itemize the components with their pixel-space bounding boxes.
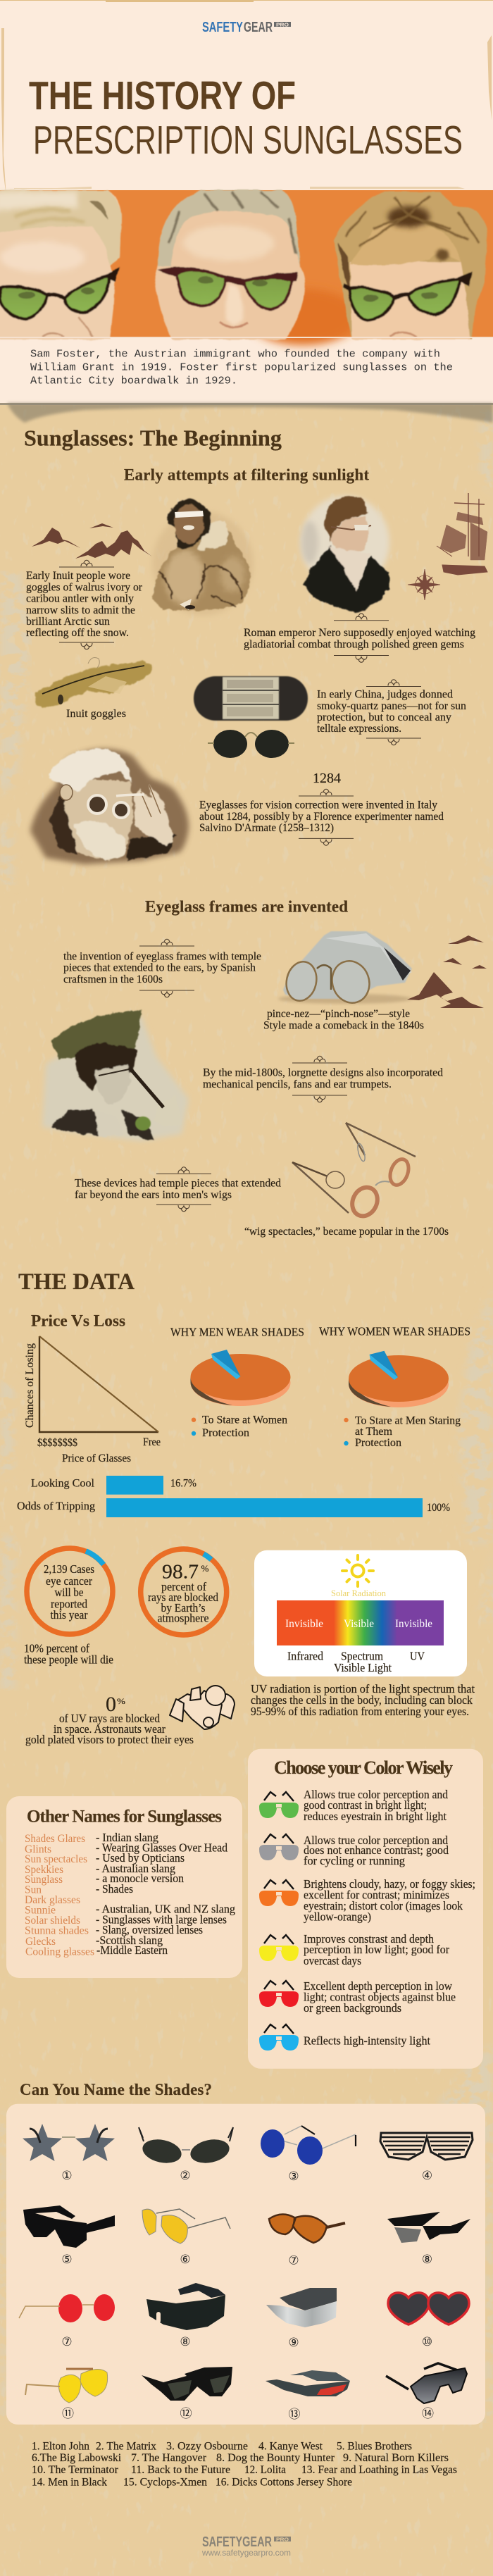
image: Chinese smoky quartz glasses and case (194, 676, 308, 758)
answers list: 3. Ozzy Osbourne (166, 2441, 248, 2453)
panel: quiz sunglasses grid (6, 2104, 485, 2425)
shades 12 black wrap (142, 2367, 232, 2421)
stat circle: rays blocked: percent of (161, 1580, 206, 1593)
color item: orange lens: excellent for contrast; minimizes (304, 1889, 449, 1902)
name notes: - Australian, UK and NZ slang (96, 1903, 235, 1916)
image: Inuit goggles (35, 658, 151, 709)
name notes: - Indian slang (96, 1831, 158, 1844)
names list: Sunglass (25, 1874, 63, 1886)
answers list: 13. Fear and Loathing in Las Vegas (301, 2464, 457, 2476)
text: Inuit goggles history: Early Inuit people wore (26, 570, 130, 582)
text: Inuit goggles history (26, 570, 143, 639)
text: UV radiation: UV radiation is portion of the light spectrum that (251, 1682, 475, 1695)
heading: the data: THE DATA (18, 1269, 135, 1295)
stat: zero percent in space: in space. Astronauts wear (54, 1722, 166, 1736)
heading: sunglasses the beginning: Sunglasses: The Beginning (24, 425, 282, 451)
photo: Inuit person with goggles (152, 499, 254, 616)
name notes: - Wearing Glasses Over Head (96, 1841, 228, 1854)
shades 4: shutter: ④ (422, 2169, 432, 2183)
text: eyeglasses invented: about 1284, possibly by a Florence experimenter named (199, 811, 444, 823)
text: UV radiation (251, 1682, 475, 1718)
text: Nero: gladiatorial combat through polished green gems (244, 639, 464, 651)
shades 5: wayfarer (23, 2205, 115, 2267)
answers list: 2. The Matrix (96, 2441, 156, 2453)
panel: solar radiation: Spectrum (341, 1650, 383, 1663)
shades 12 black wrap: ⑫ (180, 2407, 192, 2421)
pie chart: why women wear shades (319, 1325, 470, 1449)
names list: Cooling glasses (25, 1946, 94, 1958)
text: Inuit goggles history: caribou antler with only (26, 593, 134, 605)
panel: solar radiation: Solar Radiation (331, 1588, 386, 1598)
panel: choose your color wisely (248, 1749, 483, 2069)
icon: astronaut (170, 1686, 235, 1729)
stat circle: rays blocked: 98.7 (162, 1561, 199, 1583)
chart: price vs loss: Chances of Losing (24, 1343, 36, 1428)
bar chart: looking cool vs tripping (17, 1476, 450, 1517)
names list: Sunnie (25, 1905, 56, 1917)
logo: SAFETY (202, 20, 243, 35)
names list: Glints (25, 1843, 51, 1855)
shades 8: sport earbud: ⑧ (422, 2253, 432, 2267)
text: temple pieces: These devices had temple pieces that extended (75, 1178, 281, 1190)
text: lorgnette: mechanical pencils, fans and ear trumpets. (203, 1078, 392, 1090)
color item: yellow lens: perception in low light; good for (304, 1943, 449, 1956)
chart: price vs loss (24, 1312, 161, 1464)
image: wig spectacles (292, 1123, 416, 1220)
shades 5: wayfarer: ⑤ (61, 2253, 73, 2267)
stat: zero percent in space (25, 1693, 194, 1746)
shades 10 heart: ⑩ (422, 2335, 432, 2349)
answers list: 12. Lolita (244, 2464, 286, 2476)
text: 10 percent (24, 1642, 113, 1667)
chart title: Price Vs Loss (31, 1312, 125, 1330)
answers list (32, 2441, 457, 2489)
shades 11 yellow gold (25, 2369, 108, 2421)
footer logo and url: SAFETYGEAR (202, 2534, 272, 2550)
color item: gray lens: does not enhance contrast; good (304, 1843, 449, 1857)
photo: three faces in green sunglasses (0, 190, 493, 345)
stat circle: rays blocked: by Earth’s (161, 1601, 206, 1614)
text: pince-nez (263, 1008, 424, 1031)
text: Nero: Roman emperor Nero supposedly enjoyed watching (244, 627, 475, 639)
title: THE HISTORY OF (29, 73, 296, 118)
panel: solar radiation: Visible Light (334, 1661, 392, 1674)
bar chart: looking cool vs tripping: 100% (427, 1502, 450, 1514)
color item: gray lens: for cycling or running (304, 1854, 405, 1867)
color item: red lens: or green backgrounds (304, 2001, 401, 2015)
shades 14 shield: ⑭ (422, 2407, 434, 2421)
image: pince-nez in silver case (278, 931, 412, 1008)
panel: solar radiation (254, 1550, 467, 1676)
shades 6: yellow aviator (142, 2209, 230, 2267)
answers list: 15. Cyclops-Xmen (123, 2477, 207, 2489)
answers list: 4. Kanye West (258, 2441, 323, 2453)
logo (202, 20, 291, 35)
pie chart: why women wear shades: Protection (355, 1437, 401, 1449)
shades 4: shutter (380, 2133, 473, 2183)
shades 7 red round (19, 2294, 115, 2349)
icon: mountains right (407, 935, 487, 1008)
name notes: - Used by Opticians (96, 1851, 185, 1865)
answers list: 16. Dicks Cottons Jersey Shore (216, 2477, 352, 2489)
text: Inuit goggles history: goggles of walrus ivory or (26, 582, 143, 594)
shades 9 visor: ⑨ (288, 2336, 299, 2350)
text: lorgnette (203, 1067, 443, 1090)
stat circle: eye cancer cases: this year (51, 1608, 88, 1622)
panel: choose your color wisely: Choose your Color Wisely (274, 1757, 453, 1778)
bar chart: looking cool vs tripping: Odds of Tripping (17, 1500, 95, 1512)
stat: zero percent in space: 0 (106, 1693, 116, 1716)
text: lorgnette: By the mid-1800s, lorgnette designs also incorporated (203, 1067, 443, 1079)
photo caption: William Grant in 1919. Foster first popularized sunglasses on the (30, 362, 453, 374)
shades 13 cyclops: ⑬ (289, 2408, 300, 2422)
text: Nero (244, 627, 475, 651)
stat circle: rays blocked: atmosphere (158, 1612, 208, 1625)
text: 10 percent: these people will die (24, 1653, 113, 1667)
pie chart: why women wear shades: WHY WOMEN WEAR SHADES (319, 1325, 470, 1338)
photo: woman with lorgnette (42, 1010, 189, 1141)
logo: GEAR (244, 20, 273, 35)
names list (25, 1833, 94, 1958)
shades 7 red round: ⑦ (61, 2335, 73, 2349)
color item: orange lens: eyestrain; distort color (images look (304, 1899, 463, 1912)
stat: zero percent in space: % (117, 1696, 125, 1706)
pie chart: why women wear shades: at Them (355, 1426, 392, 1438)
color item: gray lens: Allows true color perception and (304, 1834, 449, 1847)
section shadow band (0, 403, 493, 423)
chart: price vs loss: Free (143, 1436, 161, 1448)
text: eyeglass frames invention: the invention of eyeglass frames with temple (63, 951, 261, 962)
pie chart: why men wear shades: WHY MEN WEAR SHADES (170, 1326, 304, 1339)
text: UV radiation: 95-99% of this radiation from entering your eyes. (251, 1705, 469, 1718)
color item: green lens: reduces eyestrain in bright light (304, 1810, 447, 1823)
text: eyeglasses invented: Eyeglasses for vision correction were invented in Italy (199, 799, 437, 811)
color item: orange lens (259, 1877, 475, 1924)
text: Inuit goggles history: brilliant Arctic sun (26, 616, 110, 628)
text: pince-nez: pince-nez—“pinch-nose”—style (267, 1008, 410, 1020)
shades 8: sport earbud (387, 2212, 470, 2267)
shades 3: round blue (261, 2126, 356, 2184)
shades 8 wrap black: ⑧ (180, 2335, 191, 2349)
color item: gray lens (259, 1834, 449, 1867)
answers list: 10. The Terminator (32, 2464, 119, 2476)
panel: solar radiation: Visible (344, 1618, 374, 1630)
names list: Glecks (25, 1936, 56, 1948)
pie chart: why women wear shades: To Stare at Men Staring (355, 1415, 461, 1427)
names list: Sun spectacles (25, 1853, 87, 1865)
text: early China: telltale expressions. (317, 723, 401, 735)
stat circle: rays blocked (141, 1549, 227, 1635)
shades 1: stars: ① (61, 2169, 73, 2183)
answers list: 6.The Big Labowski (32, 2452, 122, 2464)
stat circle: eye cancer cases: eye cancer (46, 1574, 92, 1588)
names list: Shades Glares (25, 1833, 85, 1845)
stat circle: eye cancer cases (27, 1548, 113, 1634)
panel: other names for sunglasses: Other Names for Sunglasses (27, 1807, 222, 1827)
bar chart: looking cool vs tripping: Looking Cool (31, 1478, 94, 1490)
text: UV radiation: changes the cells in the body, including can block (251, 1693, 473, 1707)
panel: solar radiation: Invisible (285, 1618, 323, 1630)
names list: Solar shields (25, 1915, 80, 1927)
text: eyeglass frames invention: craftsmen in the 1600s (63, 973, 163, 985)
color item: orange lens: yellow-orange) (304, 1910, 371, 1924)
answers list: 7. The Hangover (131, 2452, 207, 2464)
answers list: 11. Back to the Future (131, 2464, 230, 2476)
shades 1: stars (23, 2124, 115, 2183)
text: early China: smoky-quartz panes—not for sun (317, 700, 466, 712)
text: temple pieces (75, 1178, 281, 1201)
panel: solar radiation: Invisible (395, 1618, 432, 1630)
heading: can you name the shades: Can You Name the Shades? (20, 2081, 212, 2098)
logo: PRO (276, 23, 289, 27)
name notes: - a monocle version (96, 1872, 184, 1885)
subheading: early attempts: Early attempts at filtering sunlight (124, 466, 369, 484)
shades 8 wrap black (146, 2283, 225, 2349)
icon: sun (342, 1555, 373, 1586)
name notes: - Slang, oversized lenses (96, 1923, 203, 1936)
names list: Dark glasses (25, 1894, 80, 1906)
name notes: - Shades (96, 1882, 133, 1896)
shades 13 cyclops (266, 2370, 350, 2422)
color item: orange lens: Brightens cloudy, hazy, or foggy skies; (304, 1877, 475, 1891)
text: early China (317, 689, 466, 735)
text: eyeglasses invented: Salvino D'Armate (1258–1312) (199, 822, 334, 834)
footer logo and url: www.safetygearpro.com (201, 2548, 291, 2558)
year: 1284: 1284 (313, 771, 341, 786)
shades 14 shield (386, 2363, 467, 2421)
panel: other names for sunglasses (6, 1796, 242, 1978)
shades 2: oval dark: ② (180, 2169, 191, 2183)
color item: yellow lens (259, 1932, 449, 1967)
color item: green lens (259, 1788, 449, 1823)
pie chart: why men wear shades: To Stare at Women (202, 1414, 287, 1426)
stat circle: eye cancer cases: reported (51, 1598, 87, 1611)
text: eyeglass frames invention (63, 951, 261, 985)
title (29, 73, 463, 163)
color item: red lens: Excellent depth perception in low (304, 1979, 452, 1993)
pie chart: why men wear shades (170, 1326, 304, 1439)
stat circle: eye cancer cases: will be (55, 1586, 83, 1599)
color item: red lens: light; contrast objects against blue (304, 1991, 456, 2004)
name notes: -Scottish slang (96, 1934, 163, 1947)
color item: green lens: good contrast in bright light; (304, 1798, 427, 1812)
name notes: - Australian slang (96, 1862, 175, 1875)
shades 9 visor (266, 2288, 337, 2350)
name notes: -Middle Eastern (96, 1943, 168, 1957)
pie chart: why men wear shades: Protection (202, 1427, 249, 1439)
text: early China: In early China, judges donned (317, 689, 453, 700)
text: eyeglasses invented (199, 799, 444, 834)
stat: zero percent in space: gold plated visors to protect their eyes (25, 1733, 194, 1746)
answers list: 14. Men in Black (32, 2477, 107, 2489)
subheading: eyeglass frames: Eyeglass frames are invented (145, 897, 348, 915)
answers list: 8. Dog the Bounty Hunter (216, 2452, 335, 2464)
footer logo and url (201, 2534, 291, 2558)
text: wig spectacles: “wig spectacles,” became popular in the 1700s (244, 1226, 449, 1238)
photo caption: Atlantic City boardwalk in 1929. (30, 375, 237, 387)
color item: green lens: Allows true color perception and (304, 1788, 449, 1801)
stat circle: rays blocked: rays are blocked (148, 1591, 218, 1604)
chart: price vs loss: Price of Glasses (62, 1452, 131, 1464)
photo caption (30, 348, 453, 387)
color item: blue lens: Reflects high-intensity light (304, 2034, 430, 2048)
names list: Spekkies (25, 1864, 63, 1876)
text: 10 percent: 10% percent of (24, 1642, 89, 1655)
shades 7: orange tortoise (269, 2214, 345, 2268)
label: Inuit goggles: Inuit goggles (66, 708, 126, 720)
shades 7: orange tortoise: ⑦ (288, 2254, 299, 2268)
icon: sailing ship (437, 493, 487, 575)
answers list: 5. Blues Brothers (337, 2441, 412, 2453)
photo caption: Sam Foster, the Austrian immigrant who founded the company with (30, 348, 440, 361)
panel: solar radiation: UV (410, 1650, 425, 1663)
name notes: - Sunglasses with large lenses (96, 1913, 227, 1927)
footer logo and url: PRO (276, 2537, 289, 2542)
text: eyeglass frames invention: pieces that extended to the ears, by Spanish (63, 962, 256, 974)
names list: Sun (25, 1884, 42, 1896)
color item: yellow lens: overcast days (304, 1954, 361, 1967)
shades 6: yellow aviator: ⑥ (180, 2253, 191, 2267)
ornaments (59, 560, 421, 1212)
panel: solar radiation: Infrared (287, 1650, 323, 1663)
color item: yellow lens: Improves constrast and depth (304, 1932, 435, 1946)
text: Inuit goggles history: narrow slits to admit the (26, 604, 135, 616)
icon: mountains (32, 523, 152, 559)
text: temple pieces: far beyond the ears into men's wigs (75, 1189, 232, 1201)
shades 3: round blue: ③ (288, 2170, 299, 2184)
text: pince-nez: Style made a comeback in the 1840s (263, 1020, 424, 1031)
stat circle: eye cancer cases: 2,139 Cases (44, 1562, 94, 1576)
illustration: man with early eyeglasses (30, 749, 189, 864)
icon: compass rose (408, 569, 440, 600)
photo: portrait with green lenses (301, 496, 389, 613)
color item: blue lens (259, 2024, 430, 2051)
shades 11 yellow gold: ⑪ (62, 2407, 74, 2421)
shades 2: oval dark (139, 2127, 233, 2183)
bar chart: looking cool vs tripping: 16.7% (170, 1478, 196, 1490)
answers list: 1. Elton John (32, 2441, 89, 2453)
name notes (96, 1831, 235, 1957)
text: early China: protection, but to conceal any (317, 711, 451, 723)
answers list: 9. Natural Born Killers (343, 2452, 449, 2464)
text: Inuit goggles history: reflecting off the snow. (26, 627, 129, 639)
shades 10 heart (388, 2293, 469, 2349)
stat: zero percent in space: of UV rays are blocked (59, 1712, 160, 1725)
color item: red lens (259, 1979, 456, 2015)
chart: price vs loss: $$$$$$$$ (37, 1437, 77, 1449)
names list: Stunna shades (25, 1925, 89, 1937)
stat circle: rays blocked: % (201, 1563, 209, 1574)
header panel (0, 0, 493, 403)
